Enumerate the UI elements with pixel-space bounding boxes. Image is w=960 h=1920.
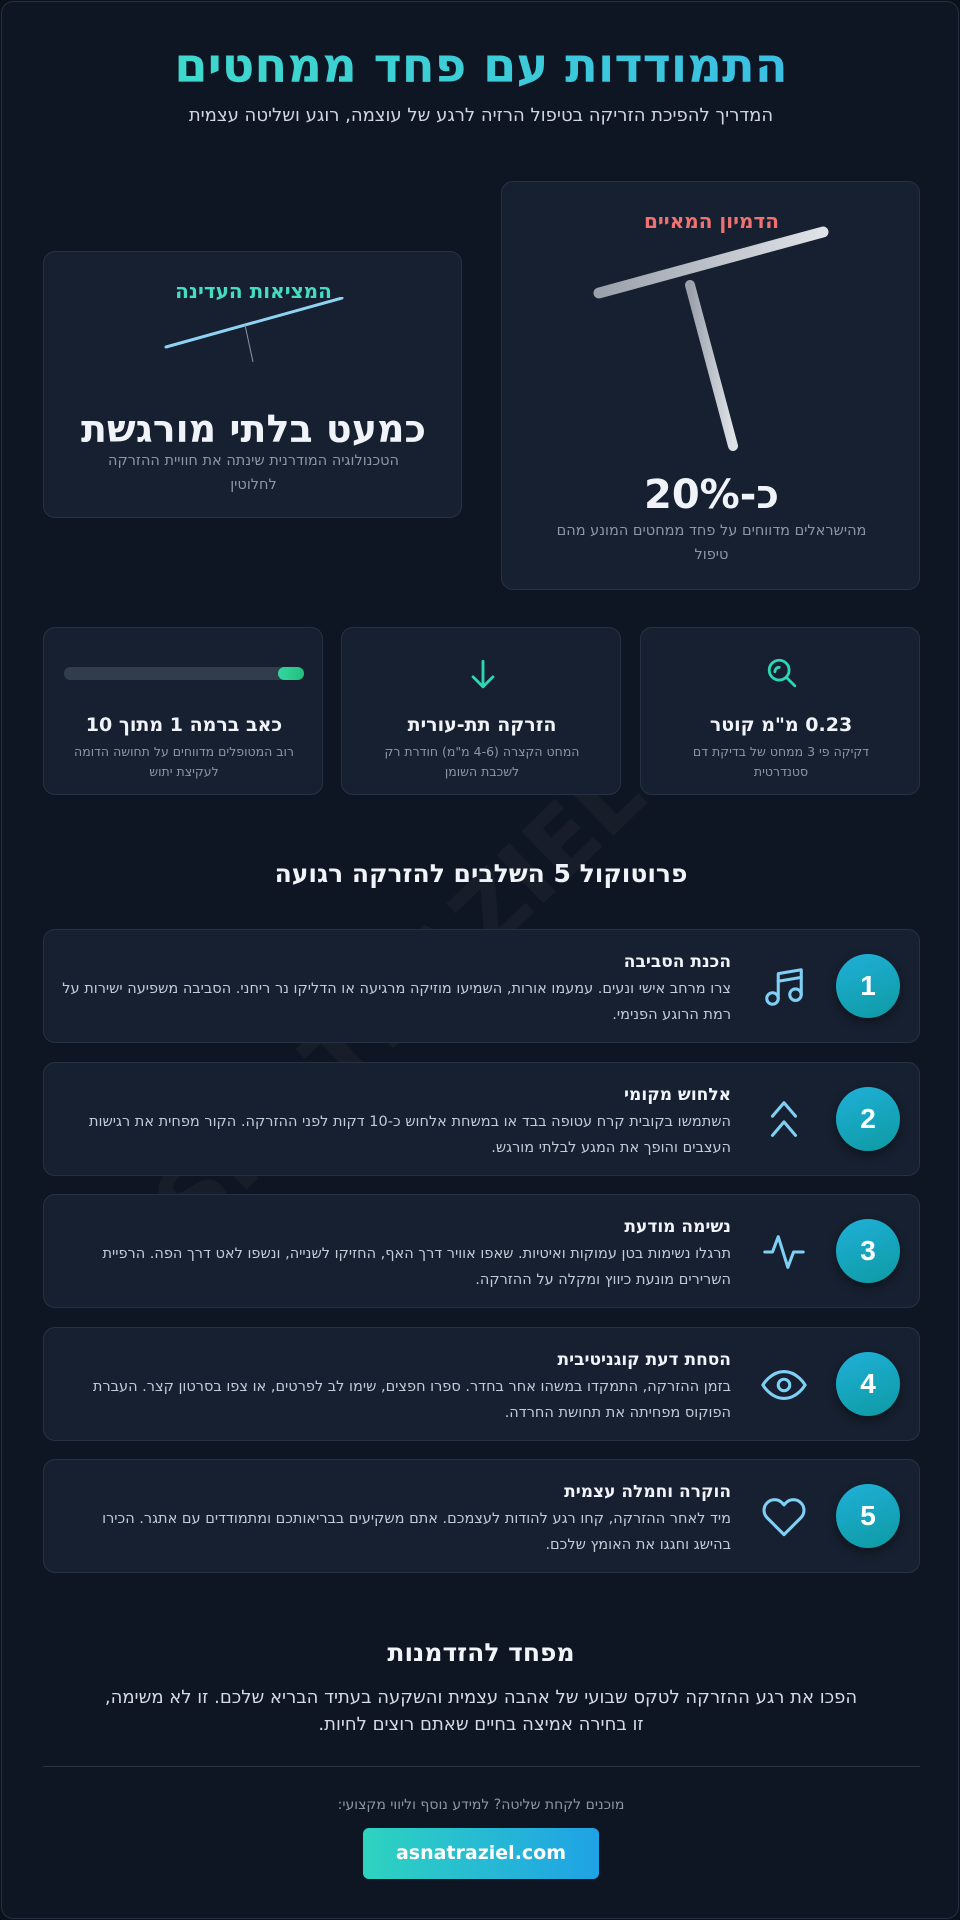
- step 5: מיד לאחר ההזרקה, קחו רגע להודות לעצמכם. אתם משקיעים בבריאותכם ומתמודדים עם אתגר. הכירו בהישג וחגגו את האומץ שלכם.: [102, 1511, 731, 1553]
- text: closing paragraph: זו בחירה אמיצה בחיים שאתם רוצים לחיות.: [318, 1714, 644, 1735]
- icon: heart: [762, 1498, 806, 1536]
- step 5: הוקרה וחמלה עצמית: [564, 1482, 731, 1502]
- text: pain 1/10: [74, 714, 294, 779]
- step 5: 5: [860, 1500, 876, 1531]
- text: 0.23: 0.23 מ"מ קוטר: [710, 714, 852, 736]
- text: subcutaneous: [384, 714, 579, 779]
- icon: big needle: [594, 226, 828, 451]
- stat: almost painless: כמעט בלתי מורגשת: [81, 407, 426, 451]
- heading: closing: מפחד להזדמנות: [387, 1638, 575, 1667]
- text: closing paragraph: הפכו את רגע ההזרקה לטקס שבועי של אהבה עצמית והשקעה בעתיד הבריא שלכם. זו לא משימה,: [105, 1687, 857, 1708]
- step 4: 4: [860, 1368, 876, 1399]
- step 1: [43, 929, 920, 1043]
- step 4: [43, 1327, 920, 1441]
- text: stat description: טיפול: [695, 547, 728, 563]
- step 2: 2: [860, 1103, 876, 1134]
- step 1: צרו מרחב אישי ונעים. עמעמו אורות, השמיעו מוזיקה מרגיעה או הדליקו נר ריחני. הסביבה משפיעה ישירות על רמת הרוגע הפנימי.: [62, 981, 731, 1023]
- icon: arrow down: [472, 660, 494, 688]
- step 3: 3: [860, 1235, 876, 1266]
- button: website: [363, 1828, 599, 1879]
- icon: chevrons: [770, 1101, 798, 1137]
- icon: pulse: [763, 1235, 805, 1269]
- step 2: השתמשו בקובית קרח עטופה בבד או במשחת אלחוש כ-10 דקות לפני ההזרקה. הקור מפחית את רגישות העצבים והופך את המגע לבלתי מורגש.: [89, 1114, 731, 1156]
- heading: protocol: פרוטוקול 5 השלבים להזרקה רגועה: [275, 859, 687, 888]
- text: pain 1/10: כאב ברמה 1 מתוך 10: [86, 714, 282, 736]
- step 2: [43, 1062, 920, 1176]
- step 2: אלחוש מקומי: [624, 1085, 731, 1105]
- heading: reality: המציאות העדינה: [175, 279, 332, 303]
- icon: music: [765, 968, 803, 1006]
- text: closing paragraph: [105, 1687, 857, 1735]
- panel: feared imagination: [501, 181, 920, 590]
- watermark: ASNATRAZIEL.: [83, 716, 690, 1307]
- title: התמודדות עם פחד ממחטים: [174, 38, 788, 94]
- panel: gentle reality: [43, 251, 462, 518]
- text: 0.23: דקיקה פי 3 ממחט של בדיקת דם סטנדרטית: [693, 744, 869, 779]
- text: 0.23: [693, 714, 869, 779]
- panel: stat needle diameter: [640, 627, 920, 795]
- step 3: נשימה מודעת: [624, 1217, 731, 1237]
- text: stat description: מהישראלים מדווחים על פחד ממחטים המונע מהם: [557, 523, 866, 539]
- text: cta prompt: מוכנים לקחת שליטה? למידע נוסף וליווי מקצועי:: [338, 1797, 624, 1813]
- text: pain 1/10: רוב המטופלים מדווחים על תחושה הדומה לעקיצת יתוש: [74, 744, 294, 779]
- text: subcutaneous: הזרקה תת-עורית: [408, 714, 556, 736]
- step 3: [43, 1194, 920, 1308]
- subtitle: המדריך להפיכת הזריקה בטיפול הרזיה לרגע של עוצמה, רוגע ושליטה עצמית: [189, 105, 773, 126]
- stat: 20%: כ-20%: [644, 472, 779, 518]
- step 1: הכנת הסביבה: [624, 952, 731, 972]
- button: website: asnatraziel.com: [396, 1842, 566, 1864]
- text: subcutaneous: המחט הקצרה (4-6 מ"מ) חודרת רק לשכבת השומן: [384, 744, 579, 779]
- text: description: הטכנולוגיה המודרנית שינתה את חוויית ההזרקה לחלוטין: [108, 453, 399, 493]
- step 4: הסחת דעת קוגניטיבית: [558, 1350, 731, 1370]
- panel: stat pain level: [43, 627, 323, 795]
- step 3: תרגלו נשימות בטן עמוקות ואיטיות. שאפו אוויר דרך האף, החזיקו לשנייה, ונשפו לאט דרך הפה. הרפיית השרירים מונעת כיווץ ומקלה על ההזרקה.: [102, 1246, 731, 1288]
- icon: thin needle: [164, 297, 344, 362]
- heading: imagined: הדמיון המאיים: [644, 209, 779, 233]
- step 5: [43, 1459, 920, 1573]
- icon: magnifier: [768, 658, 796, 688]
- title: [2, 38, 960, 94]
- step 4: בזמן ההזרקה, התמקדו במשהו אחר בחדר. ספרו חפצים, שימו לב לפרטים, או צפו בסרטון קצר. העברת הפוקוס מפחיתה את תחושת החרדה.: [93, 1379, 731, 1421]
- step 1: 1: [860, 970, 876, 1001]
- icon: pain bar: [64, 667, 304, 680]
- text: stat description: [557, 523, 866, 563]
- icon: eye: [761, 1370, 807, 1400]
- panel: stat subcutaneous: [341, 627, 621, 795]
